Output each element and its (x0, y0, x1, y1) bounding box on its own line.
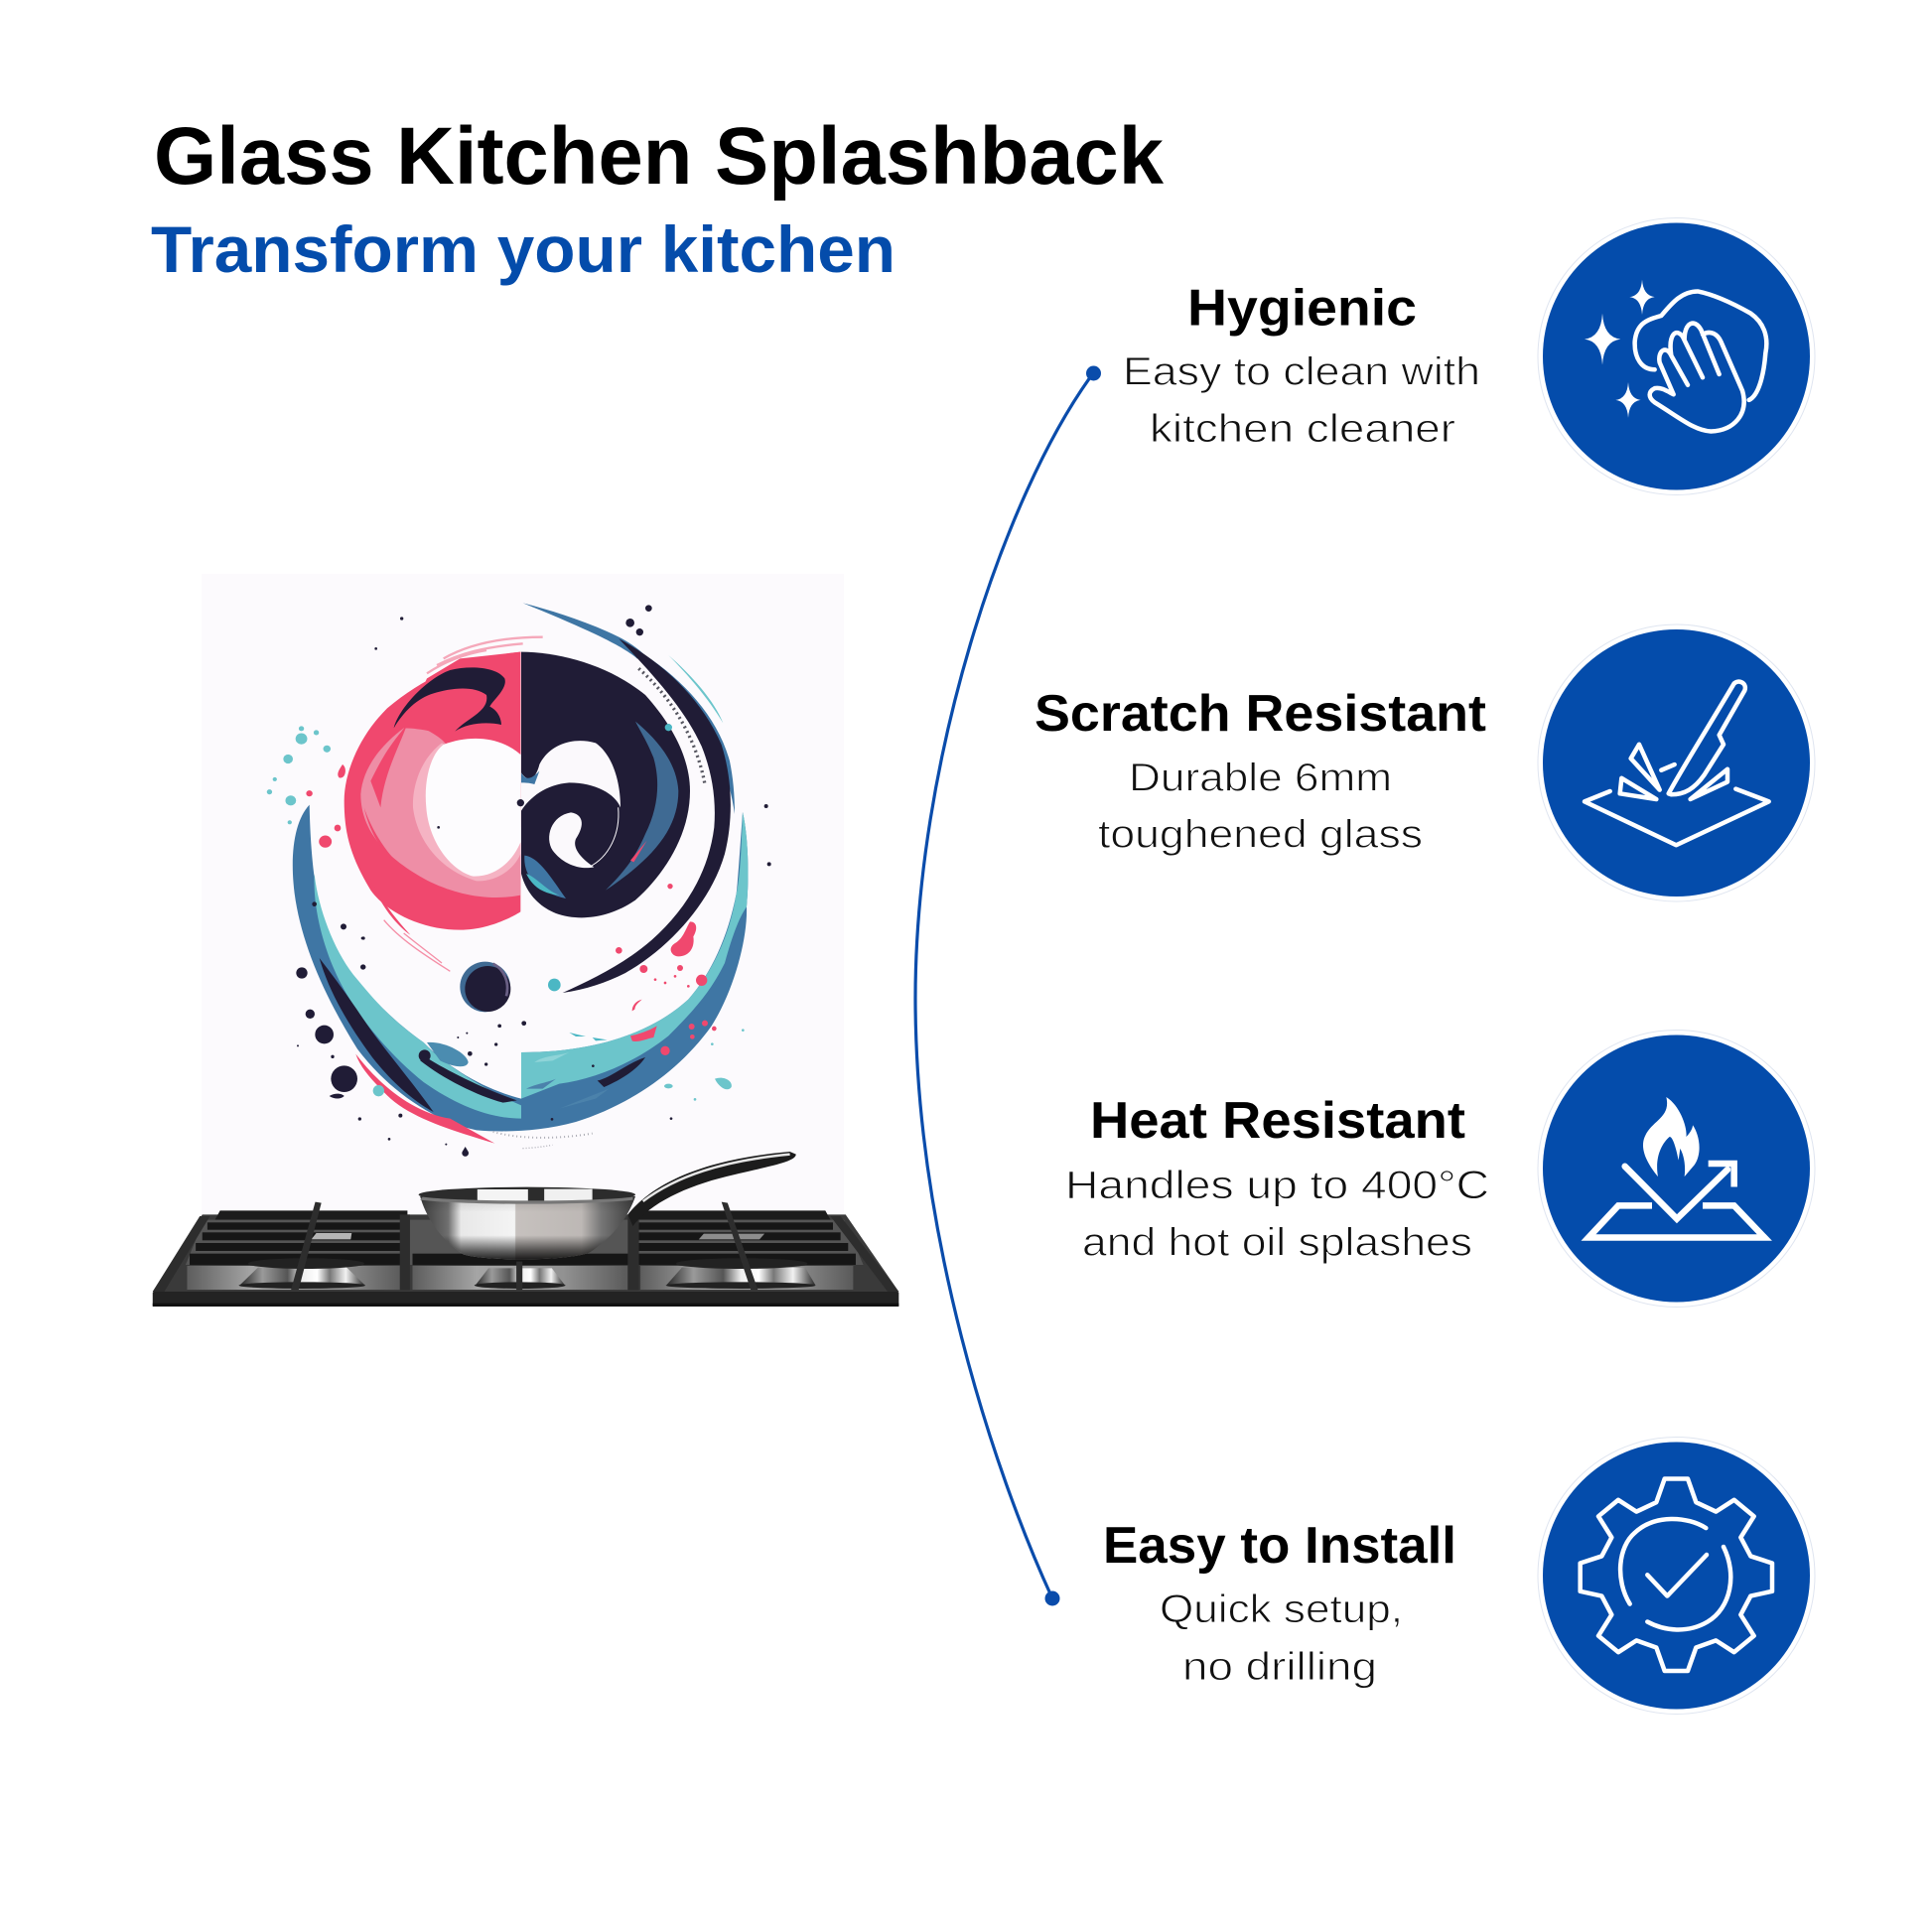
dark half blue strokes (606, 722, 678, 891)
icon: knife scratching glass (1538, 624, 1815, 901)
hob grate and burners (153, 1202, 898, 1307)
icon: gear with check mark (1538, 1438, 1815, 1714)
description: Easy to Install: Quick setup, (1160, 1587, 1403, 1631)
title: Glass Kitchen Splashback (154, 111, 1164, 202)
artwork: outer splatter (267, 726, 341, 848)
spiral centre (549, 812, 594, 868)
description: Hygienic (1123, 349, 1480, 451)
subtitle: Transform your kitchen (151, 212, 896, 286)
heading: Scratch Resistant: Scratch Resistant (1035, 685, 1486, 743)
description: Scratch Resistant (1098, 757, 1423, 856)
black specks (341, 605, 771, 1028)
pink streaks (369, 876, 410, 935)
burner crowns (239, 1233, 816, 1289)
icon: flame over heat-resistant surface (1538, 1031, 1815, 1307)
pink half ring (345, 652, 520, 930)
feature: Hygienic (1123, 280, 1480, 451)
artwork: lower splatter (296, 901, 745, 1157)
description: Hygienic: kitchen cleaner (1150, 407, 1455, 451)
pan (419, 1152, 796, 1259)
heading: Heat Resistant: Heat Resistant (1090, 1092, 1465, 1150)
artwork: central circle and dark swoosh (335, 603, 771, 1028)
dark half circle (521, 652, 690, 917)
curved connector line (915, 365, 1101, 1606)
description: Heat Resistant: and hot oil splashes (1082, 1221, 1472, 1265)
splashback panel background (202, 574, 844, 1229)
dark outer swoosh (523, 603, 735, 993)
description: Scratch Resistant: Durable 6mm (1129, 757, 1392, 800)
feature: Heat Resistant (1065, 1092, 1489, 1265)
panel: gas hob with pan (153, 1152, 898, 1307)
circle inner void (426, 739, 520, 877)
artwork: lower swoosh (293, 805, 748, 1149)
teal dots (548, 979, 561, 991)
description: Hygienic: Easy to clean with (1123, 349, 1480, 393)
heading: Hygienic: Hygienic (1187, 280, 1417, 338)
dark ball (460, 962, 510, 1012)
dark brushstroke on pink (394, 667, 505, 732)
pink splash (335, 764, 707, 988)
description: Heat Resistant (1065, 1164, 1489, 1265)
feature: Easy to Install (1103, 1517, 1456, 1689)
panel: splashback product illustration (202, 574, 844, 1229)
description: Scratch Resistant: toughened glass (1098, 812, 1423, 856)
pink swoosh top accent (427, 637, 543, 673)
description: Easy to Install: no drilling (1182, 1645, 1377, 1689)
heading: Easy to Install: Easy to Install (1103, 1517, 1456, 1575)
description: Easy to Install (1160, 1587, 1403, 1689)
icon: hand wiping with sparkles (1538, 218, 1815, 494)
description: Heat Resistant: Handles up to 400°C (1065, 1164, 1489, 1207)
feature: Scratch Resistant (1035, 685, 1486, 856)
